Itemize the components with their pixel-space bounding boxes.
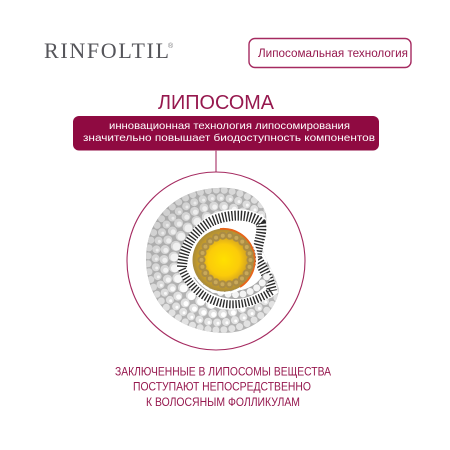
connector line — [215, 150, 217, 172]
badge: technology label: Липосомальная технология — [258, 48, 408, 60]
badge: technology label — [249, 38, 411, 68]
caption — [115, 366, 331, 409]
circle frame — [127, 172, 305, 350]
logo: Rinfoltil: RINFOLTIL — [44, 38, 169, 63]
liposome outer shell — [146, 188, 279, 333]
heading: ЛИПОСОМА — [158, 92, 275, 114]
lipid tails: lower band — [182, 269, 272, 304]
panel: description — [73, 116, 379, 150]
icon: liposome illustration — [146, 188, 279, 333]
caption: ПОСТУПАЮТ НЕПОСРЕДСТВЕННО — [133, 382, 311, 394]
bilayer cut opening — [177, 209, 278, 310]
caption: ЗАКЛЮЧЕННЫЕ В ЛИПОСОМЫ ВЕЩЕСТВА — [115, 366, 331, 378]
panel: description: инновационная технология липосомирования — [109, 120, 350, 132]
caption: К ВОЛОСЯНЫМ ФОЛЛИКУЛАМ — [146, 397, 300, 409]
logo: Rinfoltil: ® — [168, 42, 174, 50]
panel: description: значительно повышает биодоступность компонентов — [83, 132, 375, 144]
yellow core — [192, 228, 256, 292]
inner membrane: cells on the lower and right side — [191, 227, 267, 295]
lipid tails: upper band — [182, 216, 272, 291]
